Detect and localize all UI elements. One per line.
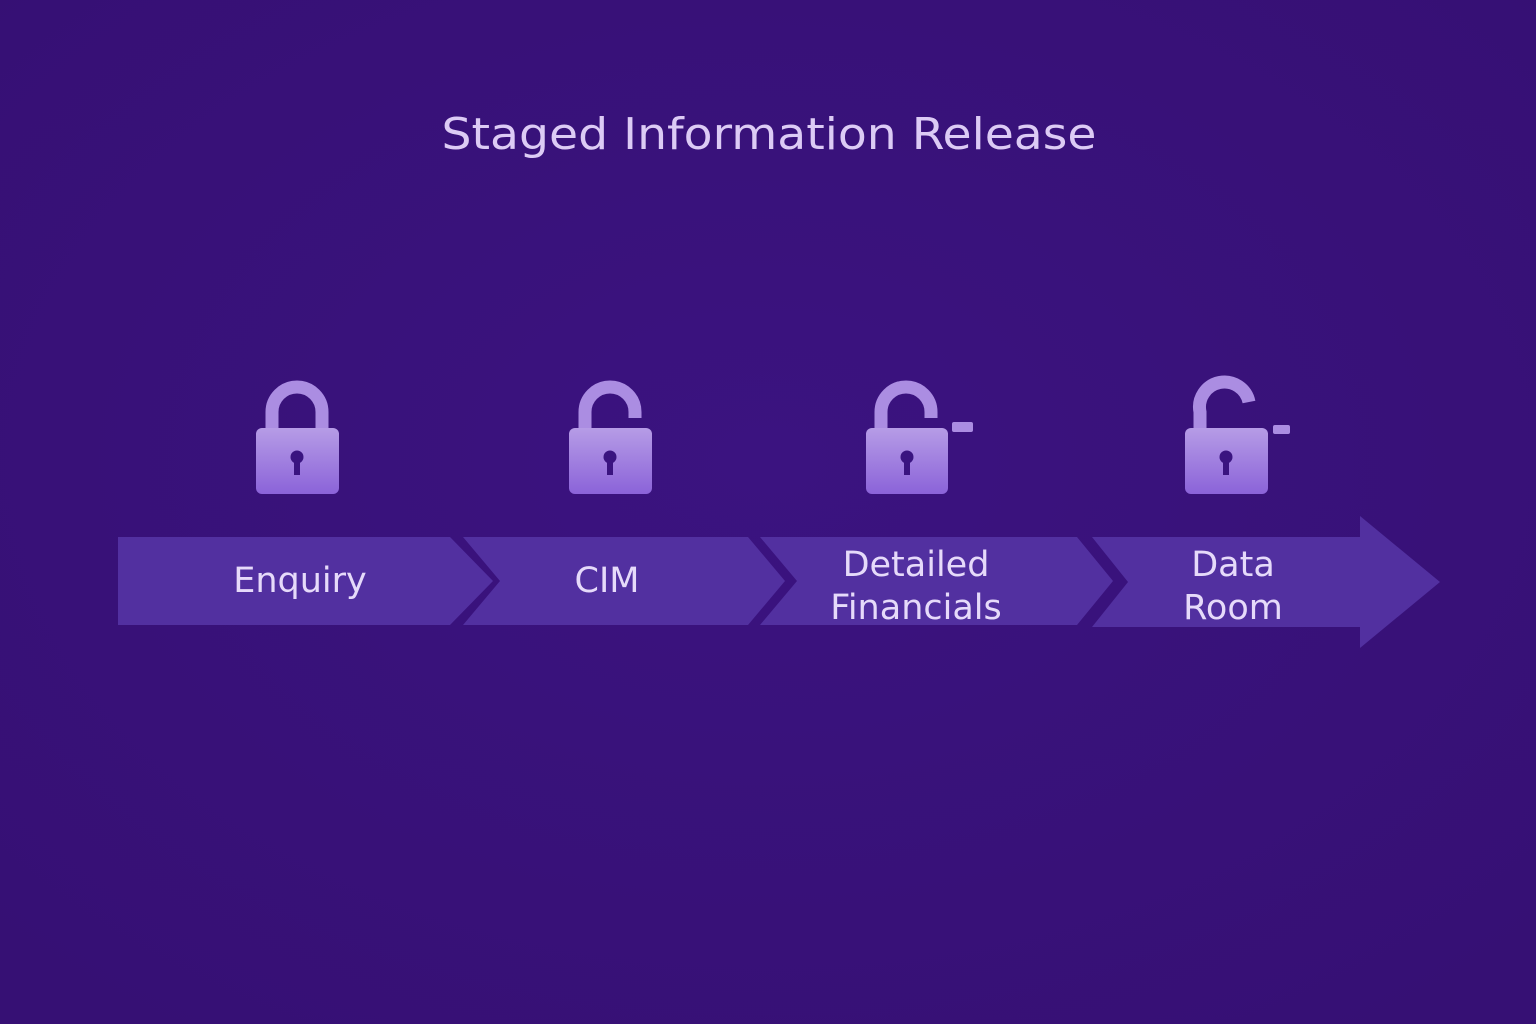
stage 4: Data Room: Room	[1183, 588, 1283, 628]
stage 3: Detailed Financials: Financials	[830, 588, 1002, 628]
stage 4: Data Room	[1092, 516, 1440, 648]
icon: open lock CIM	[569, 387, 652, 494]
stage 4: Data Room: Data	[1191, 545, 1275, 585]
icon: closed lock	[256, 387, 339, 494]
stage 1: Enquiry: Enquiry	[233, 561, 367, 601]
process arrow	[118, 516, 1440, 648]
title: Staged Information Release	[442, 109, 1096, 160]
stage 2: CIM	[463, 537, 785, 625]
stage 2: CIM: CIM	[575, 561, 639, 601]
stage 1: Enquiry	[118, 537, 493, 625]
icon: open lock Financials	[866, 387, 973, 494]
stage 3: Detailed Financials	[760, 537, 1113, 628]
stage 3: Detailed Financials: Detailed	[843, 545, 989, 585]
icon: open lock Data Room	[1185, 382, 1290, 494]
